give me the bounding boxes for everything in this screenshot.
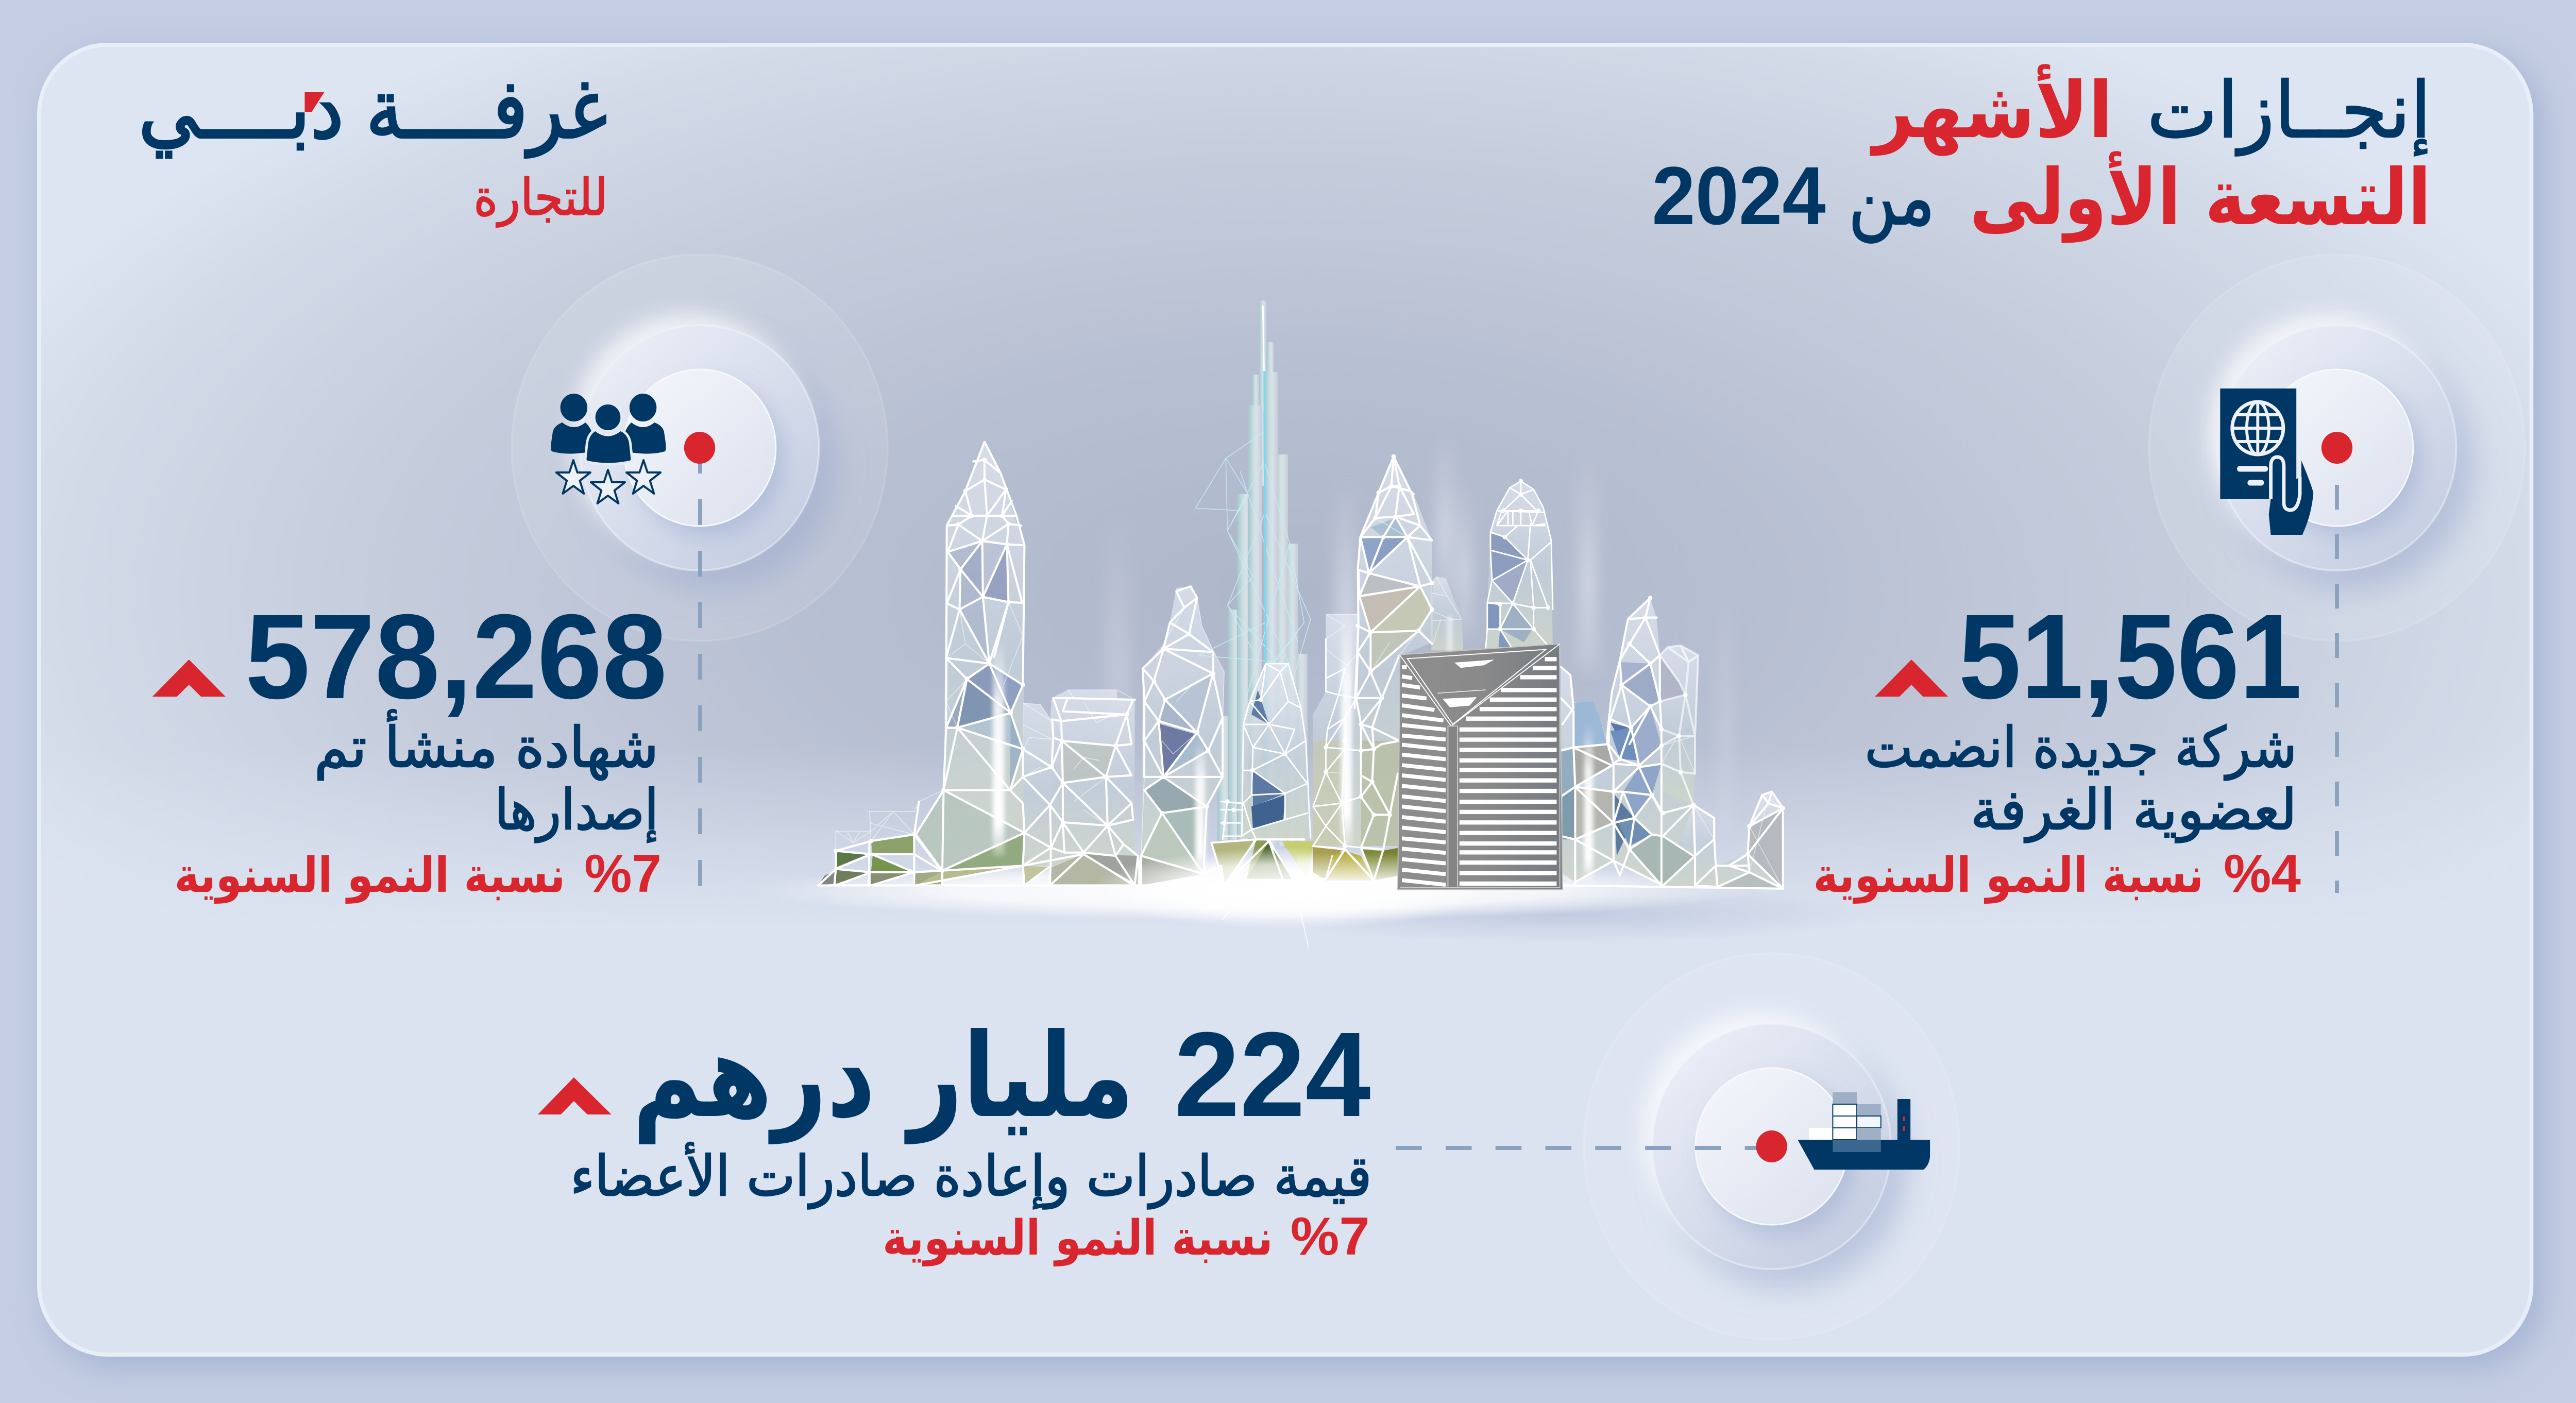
ground facets	[818, 835, 1314, 885]
building C mesh	[1141, 586, 1304, 885]
circle: members	[2149, 255, 2525, 641]
tower silhouettes	[943, 442, 1311, 874]
tower facets	[1313, 518, 1783, 889]
description line 2: إصدارها	[495, 778, 658, 842]
logo	[138, 61, 608, 227]
growth percent: %7	[584, 843, 662, 903]
soft light beams	[962, 438, 1732, 902]
skyline right half	[1297, 457, 1783, 890]
ground facets	[1313, 844, 1399, 881]
right side window stripes	[1460, 657, 1556, 886]
number: 578,268	[245, 589, 667, 724]
mesh nodes	[836, 460, 1285, 871]
up chevron	[152, 660, 226, 697]
left side window stripes	[1402, 667, 1446, 885]
stat: exports	[538, 1007, 1371, 1266]
red dot: exports	[1756, 1130, 1787, 1162]
logo word: dubai: دبــــي	[138, 61, 344, 158]
burj cyan mesh	[1195, 432, 1311, 708]
thin mesh	[1313, 457, 1783, 889]
logo word: chamber: غرفــــة	[366, 61, 607, 158]
tower J mesh	[1561, 667, 1614, 882]
logo accent	[304, 92, 324, 112]
column E mesh	[1313, 639, 1361, 879]
foreground building	[1398, 644, 1563, 890]
light beams	[993, 639, 1205, 874]
growth label: نسبة النمو السنوية	[1813, 847, 2204, 904]
title line 2 navy word: من	[1849, 153, 1935, 243]
growth percent: %4	[2224, 843, 2301, 903]
building column	[1448, 726, 1458, 888]
dashed leader: members	[2335, 485, 2339, 893]
ground antenna lines	[1222, 894, 1309, 948]
icon: passport and hand	[2220, 388, 2313, 535]
icon: people with stars	[551, 394, 666, 503]
title line 1 red: الأشهر	[1870, 64, 2113, 156]
dashed leader: certificates	[698, 448, 702, 886]
tower D mesh	[1313, 457, 1432, 881]
burj khalifa tower	[1217, 300, 1308, 850]
red dot: certificates	[684, 432, 715, 464]
thin mesh	[836, 598, 1224, 856]
logo subtitle: للتجارة	[473, 168, 608, 227]
skyline left half	[818, 412, 1489, 930]
red dot: members	[2321, 432, 2352, 464]
low ground mesh	[818, 790, 1340, 885]
tower silhouettes	[1313, 457, 1783, 889]
unit: مليار درهم	[633, 1009, 1134, 1144]
description: قيمة صادرات وإعادة صادرات الأعضاء	[570, 1142, 1371, 1209]
stat: certificates	[152, 589, 667, 904]
building B mesh	[1023, 698, 1141, 885]
number: 51,561	[1959, 589, 2302, 724]
title year: 2024	[1652, 150, 1826, 242]
title	[1652, 64, 2431, 244]
title line 1 navy: إنجــازات	[2147, 65, 2431, 157]
growth percent: %7	[1291, 1206, 1370, 1266]
light beams	[1341, 613, 1593, 882]
title line 2 red: التسعة الأولى	[1970, 151, 2431, 244]
ground fade	[1297, 853, 1402, 885]
mesh nodes	[1326, 457, 1783, 854]
dashed leader: exports	[1396, 1146, 1759, 1150]
tower H and low right mesh	[1563, 598, 1783, 889]
growth label: نسبة النمو السنوية	[175, 847, 565, 904]
building body	[1398, 644, 1563, 890]
stat: members	[1813, 589, 2302, 904]
circle: certificates	[512, 255, 888, 641]
ground glow	[752, 860, 1754, 920]
description line 1: شهادة منشأ تم	[314, 709, 658, 780]
up chevron	[1875, 660, 1948, 697]
number: 224	[1174, 1007, 1371, 1142]
tower facets	[916, 541, 1285, 874]
tower A mesh	[943, 442, 1024, 833]
ground fade	[1093, 848, 1489, 930]
circle: exports	[1584, 953, 1960, 1340]
description line 1: شركة جديدة انضمت	[1865, 716, 2297, 780]
icon: container ship	[1798, 1092, 1930, 1170]
roof windows	[1454, 660, 1494, 668]
up chevron	[538, 1077, 612, 1114]
back tower I mesh	[1660, 646, 1698, 805]
building roof triangle	[1400, 644, 1560, 726]
description line 2: لعضوية الغرفة	[1971, 778, 2297, 842]
central dense mesh	[1221, 664, 1311, 839]
growth label: نسبة النمو السنوية	[883, 1210, 1273, 1266]
tower G mesh	[1486, 481, 1553, 649]
ground shadow	[1253, 886, 1874, 943]
